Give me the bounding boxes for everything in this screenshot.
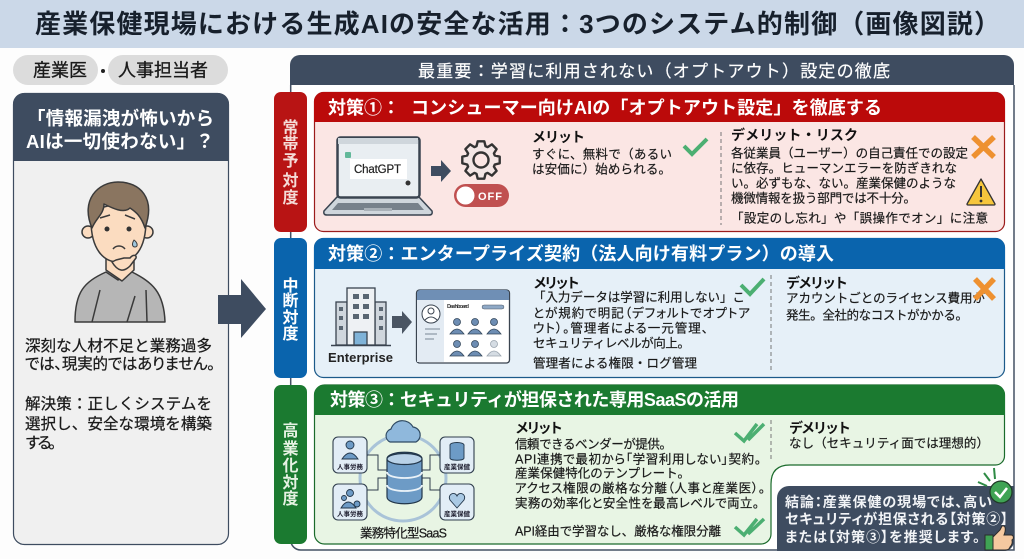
text: problem and solution: 深刻な人材不足と業務過多: [25, 337, 212, 355]
text: merit 3: API連携で最初から「学習利用しない」契約。: [515, 452, 761, 466]
text: demerit 1: [731, 127, 988, 226]
tab: level 2 blue: [274, 238, 307, 378]
icon: OFF toggle: OFF: [478, 191, 502, 203]
panel header: question: AIは一切使わない」？: [26, 131, 214, 152]
audience pills: [13, 55, 228, 85]
text: demerit 3: なし（セキュリティ面では理想的）: [789, 436, 989, 450]
heading: measure 3: [314, 385, 1005, 415]
arrow: problem to measures: [218, 279, 266, 338]
heading: measure 1: コンシューマー向けAIの「オプトアウト設定」を徹底する: [411, 98, 882, 118]
text: demerit 1: 機微情報を扱う部門では不十分。: [731, 190, 916, 206]
text: merit 1: すぐに、無料で（あるい: [532, 146, 672, 162]
tab: level 1 red: 常: [282, 119, 299, 137]
label: Enterprise: Enterprise: [328, 350, 393, 365]
text: merit 3: メリット: [515, 420, 563, 436]
text: problem and solution: 選択し、安全な環境を構築: [25, 415, 212, 433]
icon: laptop with ChatGPT: [324, 138, 432, 215]
text: problem and solution: する。: [25, 434, 64, 452]
tab: level 1 red: [274, 92, 307, 232]
text: demerit 1: に依存。ヒューマンエラーを防ぎきれな: [731, 160, 957, 176]
panel header: question: [13, 93, 229, 161]
tab: level 1 red: 帯: [282, 134, 299, 153]
tab: level 2 blue: 断: [282, 292, 299, 310]
tab: level 3 green: [274, 385, 307, 544]
icon: green check badge: [978, 468, 1012, 503]
icon: gear: [462, 141, 500, 179]
heading: most important: 最重要：学習に利用されない（オプトアウト）設定の徹底: [418, 62, 890, 81]
text: merit 2: 管理者による権限・ログ管理: [533, 356, 697, 370]
panel: measure 2: [314, 238, 1005, 378]
title band: [0, 0, 1024, 48]
diagram: specialised SaaS: [333, 421, 474, 540]
text: merit 2: とが規約で明記（デフォルトでオプトア: [533, 306, 750, 320]
callout: conclusion: または【対策③】を推奨します。: [785, 529, 980, 545]
heading: measure 2: 対策②：エンタープライズ契約（法人向け有料プラン）の導入: [328, 243, 834, 264]
tab: level 1 red: 度: [282, 188, 299, 207]
text: demerit 1: 「設定のし忘れ」や「誤操作でオン」に注意: [731, 210, 988, 226]
text: merit 2: ウト）。管理者による一元管理、: [533, 320, 708, 336]
text: demerit 3: [789, 420, 989, 450]
arrow: laptop to settings: [431, 160, 451, 182]
text: merit 3: 信頼できるベンダーが提供。: [515, 436, 672, 452]
icon: worried person: [75, 182, 165, 322]
callout: conclusion: [777, 468, 1014, 551]
text: merit 3: [515, 420, 765, 538]
panel header: question: 「情報漏洩が怖いから: [27, 108, 214, 129]
text: demerit 2: 発生。全社的なコストがかかる。: [786, 308, 968, 322]
icon: double check top: [735, 424, 764, 441]
tab: level 1 red: 対: [282, 172, 299, 190]
text: merit 2: メリット: [533, 275, 580, 291]
text: problem and solution: 解決策：正しくシステムを: [25, 395, 212, 413]
text: demerit 3: デメリット: [789, 420, 851, 436]
icon: dashboard: [416, 290, 510, 363]
icon: check: [684, 139, 707, 154]
tab: level 2 blue: 対: [282, 309, 299, 327]
tab: level 3 green: 化: [282, 457, 299, 475]
heading: measure 3: 対策③：セキュリティが担保された専用SaaSの活用: [330, 389, 739, 410]
tab: level 3 green: 業: [282, 440, 299, 458]
text: merit 2: [533, 275, 750, 370]
text: merit 2: 「入力データは学習に利用しない」こ: [533, 290, 745, 304]
heading: measure 1: [314, 92, 1005, 122]
tab: level 2 blue: 中: [282, 277, 299, 295]
diagram: specialised SaaS: 人事労務: [337, 509, 364, 518]
heading: most important: [290, 55, 1014, 85]
icon: orange cross: [975, 279, 994, 299]
tab: level 3 green: 高: [282, 421, 299, 440]
icon: laptop with ChatGPT: ChatGPT: [354, 164, 401, 176]
text: demerit 1: い。必ずもな、ない。産業保健のような: [731, 176, 956, 190]
panel: measure 3: [314, 385, 1005, 544]
arrow: building to dashboard: [392, 311, 412, 334]
tab: level 2 blue: 度: [282, 324, 299, 343]
audience pills: 人事担当者: [118, 60, 208, 80]
text: merit 1: メリット: [532, 129, 585, 145]
icon: warning triangle: [967, 179, 995, 205]
panel: left problem statement: [13, 93, 229, 544]
text: demerit 2: デメリット: [786, 275, 848, 291]
icon: double check bottom: [735, 519, 764, 535]
audience pills: 産業医: [33, 60, 87, 80]
icon: enterprise building: [331, 288, 391, 346]
text: demerit 1: デメリット・リスク: [731, 127, 858, 143]
diagram: specialised SaaS: 業務特化型SaaS: [360, 526, 447, 540]
diagram: specialised SaaS: 人事労務: [337, 462, 364, 471]
text: demerit 1: 各従業員（ユーザー）の自己責任での設定: [731, 146, 968, 160]
tab: level 1 red: 予: [282, 152, 299, 170]
text: merit 3: 産業保健特化のテンプレート。: [515, 466, 690, 480]
diagram: specialised SaaS: 産業保健: [444, 509, 470, 518]
panel: right container: [290, 55, 1014, 550]
panel: measure 1: [314, 92, 1005, 232]
text: merit 1: は安価に）始められる。: [532, 162, 671, 176]
heading: measure 2: [314, 238, 1005, 269]
text: problem and solution: では、現実的ではありません。: [25, 355, 215, 373]
text: demerit 2: [786, 275, 985, 322]
icon: thumbs up: [985, 526, 1013, 550]
text: merit 1: [532, 129, 672, 176]
text: problem and solution: [25, 337, 215, 452]
text: demerit 2: アカウントごとのライセンス費用が: [786, 290, 985, 306]
text: merit 2: セキュリティレベルが向上。: [533, 336, 690, 350]
text: merit 3: 実務の効率化と安全性を最高レベルで両立。: [515, 496, 759, 510]
callout: conclusion: セキュリティが担保される【対策②】: [785, 511, 1008, 527]
icon: orange cross: [973, 137, 994, 157]
diagram: specialised SaaS: 産業保健: [444, 462, 470, 471]
title band: 産業保健現場における生成AIの安全な活用：3つのシステム的制御（画像図説）: [35, 9, 1000, 39]
icon: dashboard: Dashboard: [447, 304, 469, 310]
icon: OFF toggle: [454, 184, 509, 207]
text: merit 3: アクセス権限の厳格な分離（人事と産業医）。: [515, 480, 765, 496]
tab: level 3 green: 度: [282, 489, 299, 508]
tab: level 3 green: 対: [282, 474, 299, 492]
text: merit 3: API経由で学習なし、厳格な権限分離: [515, 524, 721, 538]
icon: check: [741, 279, 764, 294]
heading: measure 1: 対策①：: [328, 98, 400, 118]
callout: conclusion: 結論：産業保健の現場では、高い: [785, 494, 992, 510]
